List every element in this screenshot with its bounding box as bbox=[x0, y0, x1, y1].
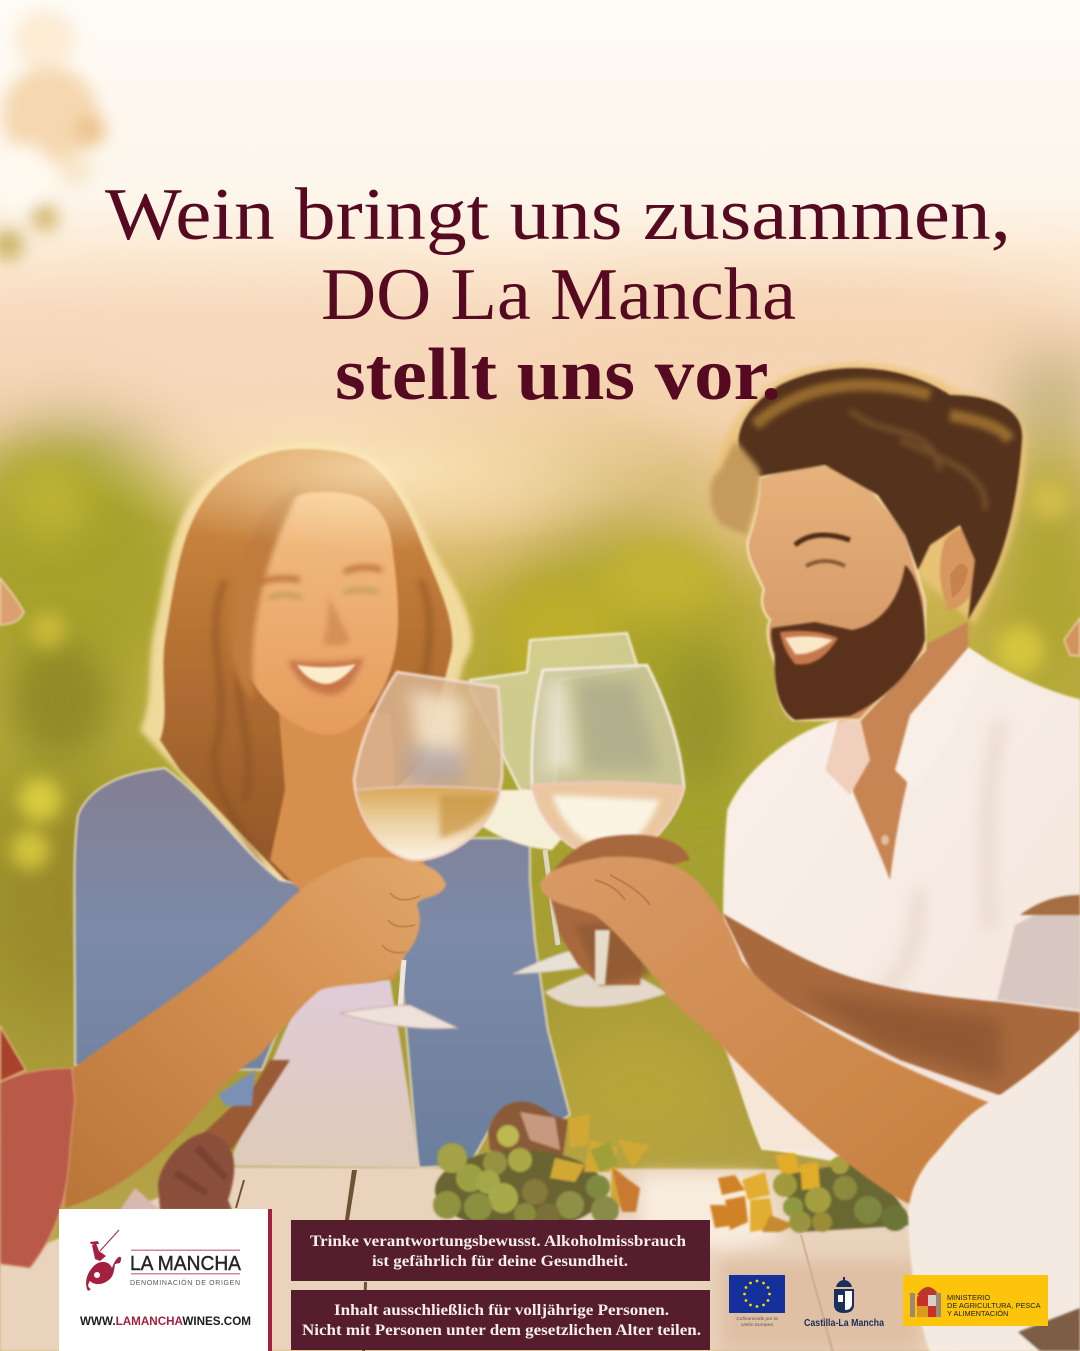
hair golden highlights bbox=[755, 385, 1010, 440]
hair shadow waves bbox=[215, 580, 430, 880]
notice: responsible drinking: ist gefährlich für deine Gesundheit. bbox=[372, 1253, 628, 1270]
person: far right hand edge bbox=[1064, 618, 1080, 656]
smile teeth bbox=[297, 664, 356, 684]
bunch of grapes, right bbox=[710, 1153, 915, 1233]
logo: Ministerio de Agricultura, Pesca y Alimentación: Y ALIMENTACIÓN bbox=[947, 1309, 1008, 1318]
hair over cheek bbox=[230, 486, 300, 700]
curl at forehead bbox=[710, 440, 760, 535]
person: red sleeve at left bbox=[0, 1026, 75, 1268]
footer panel: La Mancha logo: WWW.LAMANCHAWINES.COM bbox=[80, 1316, 251, 1328]
notice: adults only bbox=[291, 1290, 710, 1350]
arm: foreground hand and forearm bbox=[540, 857, 1005, 1205]
tank top bbox=[228, 980, 420, 1168]
arm bbox=[65, 857, 446, 1208]
logo: Ministerio de Agricultura, Pesca y Alimentación: DE AGRICULTURA, PESCA bbox=[947, 1301, 1041, 1310]
notice: adults only: Inhalt ausschließlich für volljährige Personen. bbox=[334, 1302, 669, 1319]
beard bbox=[771, 565, 925, 720]
logo: European Union flag bbox=[729, 1275, 785, 1328]
shirt shadow folds bbox=[880, 720, 1000, 990]
hands holding glass: back hand bbox=[548, 835, 690, 985]
logo: European Union flag: Unión Europea bbox=[741, 1322, 773, 1328]
cardigan bbox=[74, 768, 570, 1168]
hair bbox=[738, 368, 1022, 620]
icon: rider on seahorse bbox=[86, 1230, 121, 1291]
ear bbox=[940, 528, 985, 610]
neck and chest bbox=[838, 622, 968, 880]
face bbox=[747, 465, 925, 720]
hair rim light bbox=[140, 442, 472, 905]
glass: back bbox=[470, 633, 638, 974]
hair rim light bbox=[708, 363, 1027, 625]
title: stellt uns vor. bbox=[335, 334, 781, 416]
footer panel: La Mancha logo bbox=[59, 1209, 272, 1351]
neck and chest bbox=[270, 700, 425, 980]
bunch of grapes, centre bbox=[433, 1101, 650, 1230]
man's sleeve bbox=[997, 905, 1080, 1010]
man's arm bbox=[722, 913, 1080, 1100]
foreground: table bbox=[0, 1167, 960, 1351]
person: right foreground sleeve bbox=[909, 1030, 1080, 1351]
notice: adults only: Nicht mit Personen unter dem gesetzlichen Alter teilen. bbox=[302, 1322, 701, 1339]
logo: Ministerio de Agricultura, Pesca y Alimentación: MINISTERIO bbox=[947, 1293, 990, 1302]
hand below arm bbox=[196, 1060, 290, 1150]
footer panel: La Mancha logo: DENOMINACIÓN DE ORIGEN bbox=[130, 1278, 240, 1287]
logo: Ministerio de Agricultura, Pesca y Alimentación bbox=[903, 1275, 1048, 1326]
notice: responsible drinking: Trinke verantwortungsbewusst. Alkoholmissbrauch bbox=[310, 1233, 686, 1250]
hair bbox=[160, 449, 452, 890]
lips and teeth bbox=[780, 631, 838, 664]
title bbox=[105, 174, 1011, 416]
sun haze bbox=[80, 390, 680, 550]
glass: right bbox=[532, 665, 684, 1007]
shirt bbox=[724, 648, 1080, 1160]
title: Wein bringt uns zusammen, bbox=[105, 174, 1011, 256]
person: woman bbox=[65, 442, 570, 1208]
fingers bbox=[382, 893, 420, 953]
collar bbox=[825, 718, 870, 795]
glass: right stem bbox=[595, 930, 610, 985]
hands at the lower left bbox=[120, 1133, 234, 1210]
footer panel: La Mancha logo: LA MANCHA bbox=[130, 1253, 242, 1275]
face bbox=[237, 492, 398, 735]
title: DO La Mancha bbox=[321, 254, 796, 336]
logo: Castilla-La Mancha: Castilla-La Mancha bbox=[804, 1317, 884, 1329]
brows and eye bbox=[795, 535, 850, 566]
glass: left bbox=[340, 672, 502, 1029]
logo: Castilla-La Mancha bbox=[804, 1277, 884, 1329]
person: far left edge, nose bbox=[0, 578, 24, 625]
brows, eyes, nose, smile bbox=[260, 567, 382, 695]
logo: European Union flag: Cofinanciado por la bbox=[736, 1316, 778, 1322]
notice: responsible drinking bbox=[291, 1220, 710, 1281]
person: man bbox=[708, 363, 1080, 1160]
